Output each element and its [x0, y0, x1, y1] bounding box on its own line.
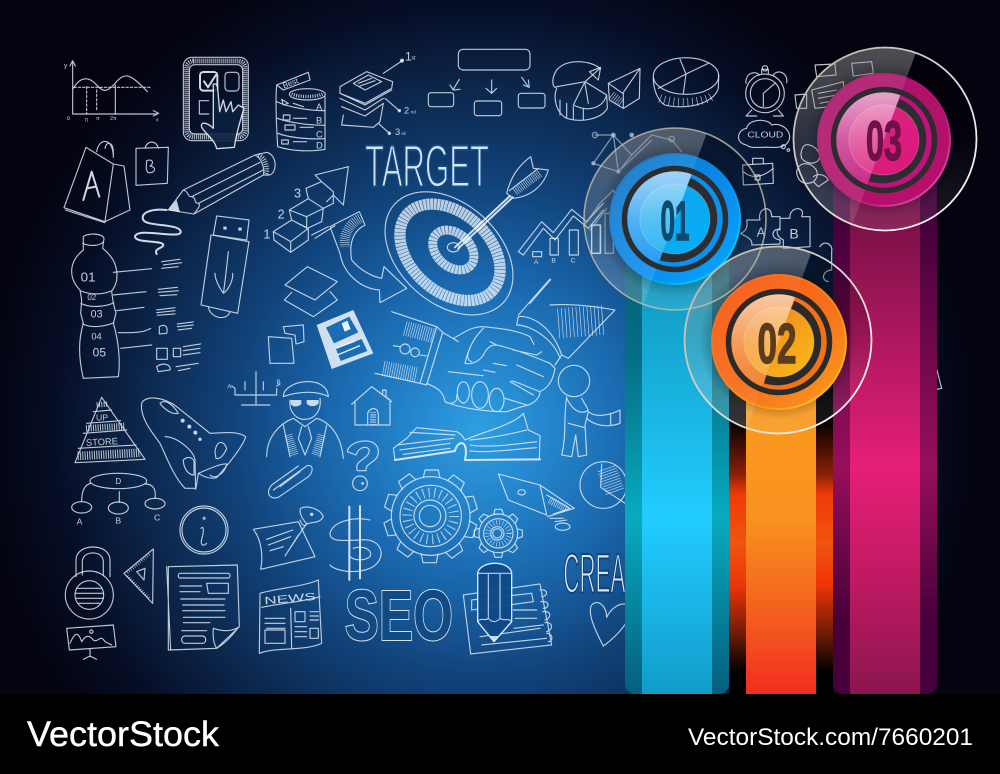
doodle: infographic bottle: 05: [93, 346, 106, 360]
doodle: briefcase: [743, 158, 773, 185]
doodles: top right: [583, 58, 942, 389]
doodle: function graph: π: [85, 118, 89, 124]
doodle: far right fragment: [935, 363, 942, 389]
doodle: growth bar chart: A: [534, 259, 539, 266]
doodle: small gear: [474, 509, 522, 557]
doodle: copy squares: [268, 325, 304, 363]
doodle: pinned note: [253, 507, 323, 569]
footer image id: VectorStock.com/7660201: [688, 724, 973, 751]
doodle: stacked books: 3: [395, 127, 400, 137]
doodle: shaking hands: [427, 327, 555, 412]
doodle: round pie: [580, 462, 627, 508]
doodle: dollar sign: [330, 506, 381, 580]
doodle: presentation screen: [67, 625, 116, 659]
doodle: curved arrow: [330, 212, 407, 303]
glass lens 03: [794, 48, 976, 230]
doodle: infographic bottle: [72, 234, 201, 378]
doodle: stacked books: st: [411, 55, 416, 61]
number 02: 02: [758, 312, 796, 376]
glass button 01: 01: [660, 189, 690, 252]
doodle: tree diagram: A: [227, 385, 231, 391]
number 03: 03: [866, 109, 902, 172]
glass button 01: [584, 128, 766, 310]
doodle: org diagram: C: [154, 513, 160, 523]
doodle: floppy disk: [317, 310, 373, 369]
doodle: open book: [393, 413, 540, 460]
doodle: stacked books: 1: [405, 50, 412, 64]
doodle: USB drive: [201, 216, 249, 318]
doodle: stacked books: rd: [401, 131, 406, 136]
doodles: top centre: [330, 49, 607, 340]
doodle: org diagram: D: [115, 477, 121, 486]
doodle: database rows: A: [316, 102, 323, 112]
doodle: org diagram: B: [115, 515, 121, 525]
doodle: set square: [124, 549, 153, 603]
doodle: org diagram: [72, 473, 165, 527]
doodle: pyramid: UP: [96, 413, 108, 423]
doodle: tree diagram: [227, 372, 281, 405]
doodle: animal behind glass: [797, 145, 828, 187]
doodle: document: [167, 565, 239, 650]
doodle: database rows: B: [316, 115, 322, 125]
doodle: pyramid: [75, 397, 145, 463]
doodle: house: [352, 387, 392, 425]
pink disc 03: [817, 73, 951, 207]
orange disc 02: [711, 274, 847, 410]
bar 02 orange: [729, 340, 833, 694]
doodle: function graph: o: [67, 116, 71, 122]
doodle: 3D pie chart: [653, 58, 719, 107]
doodle: person holding bar: [558, 365, 620, 457]
doodle: numbered stairs with arrow: [263, 167, 348, 252]
doodles: centre handshake group: [317, 279, 620, 460]
doodle: function graph: [64, 61, 159, 124]
footer brand: VectorStock: [27, 715, 220, 754]
doodle: laptop: [498, 474, 574, 530]
doodle: pencil on notebook: [463, 563, 552, 654]
doodle: numbered stairs with arrow: 1: [263, 228, 270, 242]
doodle: chart behind glass 01: [583, 132, 682, 253]
doodle: function graph: π: [96, 116, 100, 122]
doodle: pie chart left: [608, 68, 640, 108]
doodle: org diagram: A: [77, 517, 83, 527]
glass button 03: [794, 48, 976, 230]
doodle: stacked layers: [284, 267, 337, 317]
doodle: heart: [590, 603, 631, 646]
doodle: tree diagram: B: [277, 380, 281, 386]
doodle: question mark: [347, 441, 378, 491]
doodle: puzzle pieces: [741, 209, 832, 282]
doodle: rocket: [141, 398, 246, 489]
doodle: infographic bottle: 01: [81, 270, 95, 285]
glass button 02: [684, 246, 872, 434]
doodle: info circle: [180, 506, 228, 554]
footer bar: [0, 694, 1000, 774]
doodle: alarm clock: [746, 66, 787, 116]
doodle: paper clip: [269, 465, 312, 498]
doodle: shopping bag B: [136, 142, 168, 185]
bar 01 blue: [625, 219, 729, 694]
doodle: bullseye with arrow: [361, 157, 548, 340]
doodle: growth bar chart: C: [571, 258, 576, 265]
doodle: function graph: 2π: [110, 116, 117, 122]
blue disc 01: [609, 153, 741, 285]
doodle: database rows: D: [316, 141, 323, 151]
rim of glass 01 over neighbours: [584, 128, 766, 310]
glass lens 01: [584, 128, 766, 310]
doodle: infographic bottle: 02: [87, 293, 97, 302]
doodle: stacked books: [340, 50, 416, 137]
infographic canvas: CREA: [563, 541, 626, 604]
doodle: function graph: x: [156, 117, 159, 123]
doodle: shopping bag A: [64, 141, 130, 223]
doodle: infographic bottle: 04: [91, 331, 102, 341]
doodle: right sleeve: [517, 279, 615, 365]
doodle: cloud label: [739, 120, 790, 151]
doodle: puzzle pieces: A: [757, 226, 766, 240]
doodle: businessman: [267, 382, 343, 458]
doodle: newspaper: NEWS: [264, 591, 316, 607]
bar 03 pink: [833, 139, 937, 694]
doodle: documents behind glass: [795, 62, 873, 108]
doodle: database rows: [276, 72, 325, 151]
doodle: 3D pie chart: [553, 62, 607, 120]
doodle: tablet with hand: [183, 57, 248, 149]
doodle: newspaper: [259, 580, 322, 653]
doodle: target word: TARGET: [365, 133, 489, 200]
doodle: database rows: Best: [281, 76, 300, 91]
doodle: padlock: [65, 547, 113, 619]
doodle: flow chart: [428, 49, 545, 116]
doodle: numbered stairs with arrow: 2: [278, 207, 285, 221]
doodle: function graph: y: [64, 62, 68, 69]
doodles: bottom centre: [330, 441, 631, 656]
doodle: cloud label: CLOUD: [747, 130, 784, 139]
doodle: growth bar chart: [518, 203, 603, 266]
glass lens 02: [684, 246, 872, 434]
doodle: large gear: [383, 470, 478, 563]
doodle: numbered stairs with arrow: 3: [294, 186, 301, 200]
doodle: left cuff: [375, 312, 458, 385]
doodle: stacked books: 2: [404, 105, 409, 115]
doodle: puzzle pieces: B: [789, 225, 799, 241]
doodle: infographic bottle: 03: [91, 308, 103, 320]
doodle: pyramid: STORE: [86, 436, 118, 448]
doodle: growth bar chart: B: [551, 258, 556, 265]
doodle: pencil with squiggle: [135, 152, 275, 254]
doodle: SEO word: SEO: [345, 576, 453, 656]
doodle: stacked books: nd: [411, 109, 416, 114]
doodles: left column: [64, 57, 348, 378]
doodle: database rows: C: [316, 129, 323, 139]
doodles: lower left: [65, 372, 343, 659]
